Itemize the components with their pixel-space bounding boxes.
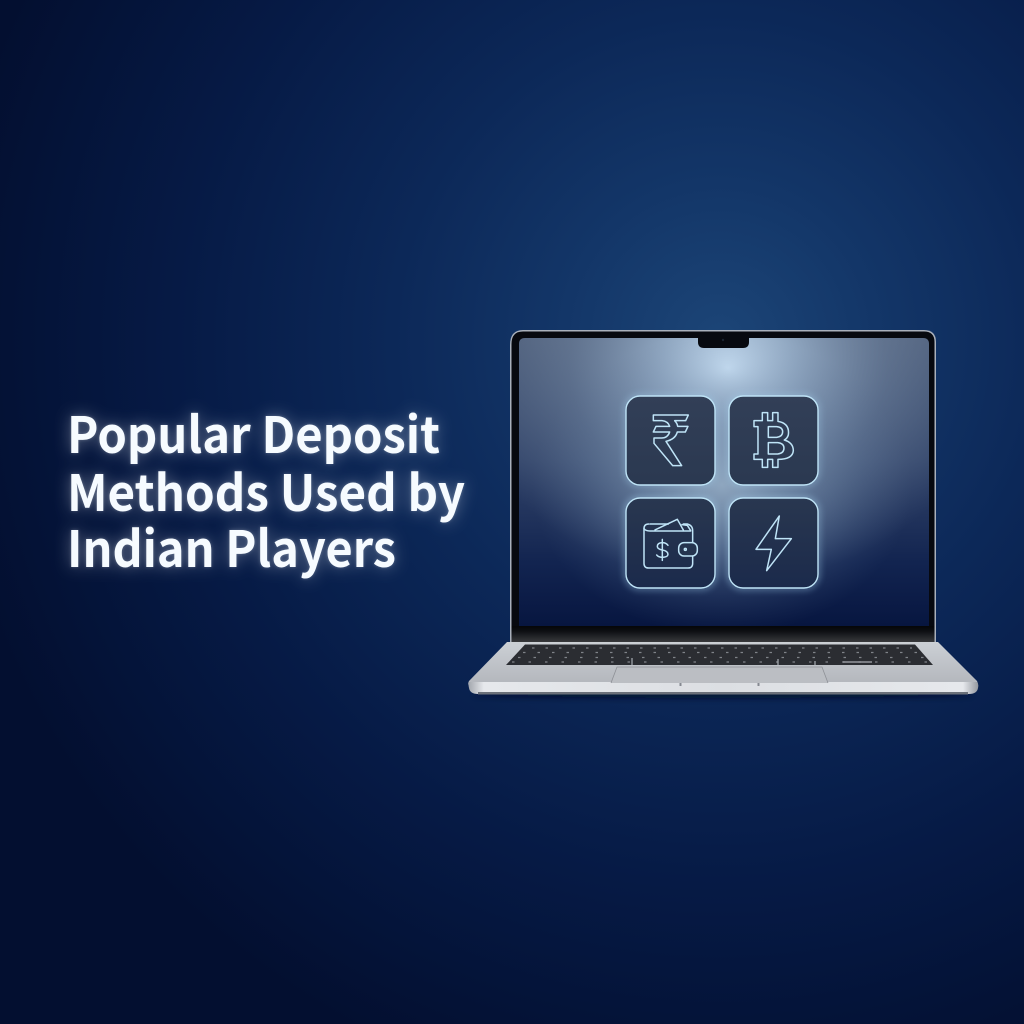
laptop shadow: [473, 692, 973, 698]
title: Indian Players: [67, 510, 396, 582]
icon: wallet: [644, 519, 697, 568]
tile: rupee: [626, 396, 715, 485]
tile: bitcoin: [729, 396, 818, 485]
trackpad: [611, 667, 828, 683]
icon: rupee: [653, 415, 688, 466]
tile: wallet: [626, 498, 715, 588]
icon: lightning bolt: [756, 516, 791, 571]
trackpad notches: [680, 683, 760, 686]
camera notch: [698, 337, 749, 348]
laptop lid: [510, 330, 936, 643]
title: Methods Used by: [67, 454, 465, 526]
laptop screen: [519, 338, 929, 626]
title: [67, 396, 465, 582]
laptop: [468, 330, 978, 698]
tile: lightning: [729, 498, 818, 588]
deck: [468, 642, 978, 686]
front edge: [468, 682, 978, 694]
icon grid: [626, 396, 818, 588]
keyboard: [506, 644, 933, 665]
icon: bitcoin: [754, 413, 793, 467]
lower bezel: [512, 626, 934, 642]
laptop base: [468, 642, 978, 694]
title: Popular Deposit: [67, 396, 440, 468]
